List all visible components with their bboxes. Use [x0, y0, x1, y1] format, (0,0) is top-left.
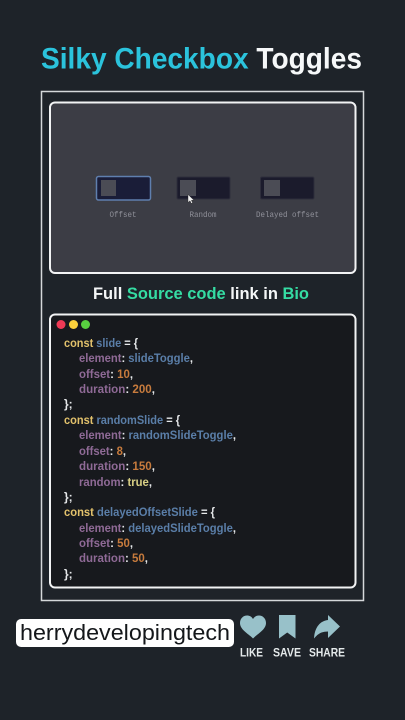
code block: };	[64, 397, 73, 411]
subheading: Full Source code link in Bio	[93, 285, 309, 303]
icon: bookmark	[279, 615, 296, 638]
icon: share arrow	[314, 615, 340, 638]
code block: random: true,	[79, 475, 152, 489]
channel name badge: herrydevelopingtech	[20, 620, 230, 645]
code block: duration: 50,	[79, 551, 148, 565]
label: like: LIKE	[240, 648, 263, 660]
outer frame	[42, 92, 364, 600]
code block: offset: 10,	[79, 367, 133, 381]
toggle: offset	[96, 176, 150, 200]
panel: toggle preview	[50, 102, 356, 273]
code block: offset: 8,	[79, 444, 126, 458]
code block: const delayedOffsetSlide = {	[64, 505, 215, 519]
label: random: Random	[190, 211, 217, 220]
toggle: delayed offset	[260, 177, 314, 199]
label: delayed offset: Delayed offset	[256, 211, 319, 220]
code block: duration: 200,	[79, 382, 155, 396]
icon: mouse cursor	[188, 194, 194, 204]
label: offset: Offset	[110, 211, 136, 220]
panel: code	[50, 314, 356, 588]
code block: element: delayedSlideToggle,	[79, 521, 236, 535]
code block: };	[64, 490, 73, 504]
title: Silky Checkbox Toggles	[41, 42, 362, 76]
label: share: SHARE	[309, 648, 345, 660]
icon: heart	[240, 616, 266, 638]
label: save: SAVE	[273, 648, 301, 660]
code block: element: slideToggle,	[79, 351, 193, 365]
code block: offset: 50,	[79, 536, 133, 550]
code block: element: randomSlideToggle,	[79, 428, 236, 442]
code block: const randomSlide = {	[64, 413, 180, 427]
code block	[64, 336, 236, 581]
code block: duration: 150,	[79, 459, 155, 473]
window dots	[56, 320, 90, 329]
toggle: random	[177, 177, 230, 199]
code block: };	[64, 567, 73, 581]
code block: const slide = {	[64, 336, 138, 350]
